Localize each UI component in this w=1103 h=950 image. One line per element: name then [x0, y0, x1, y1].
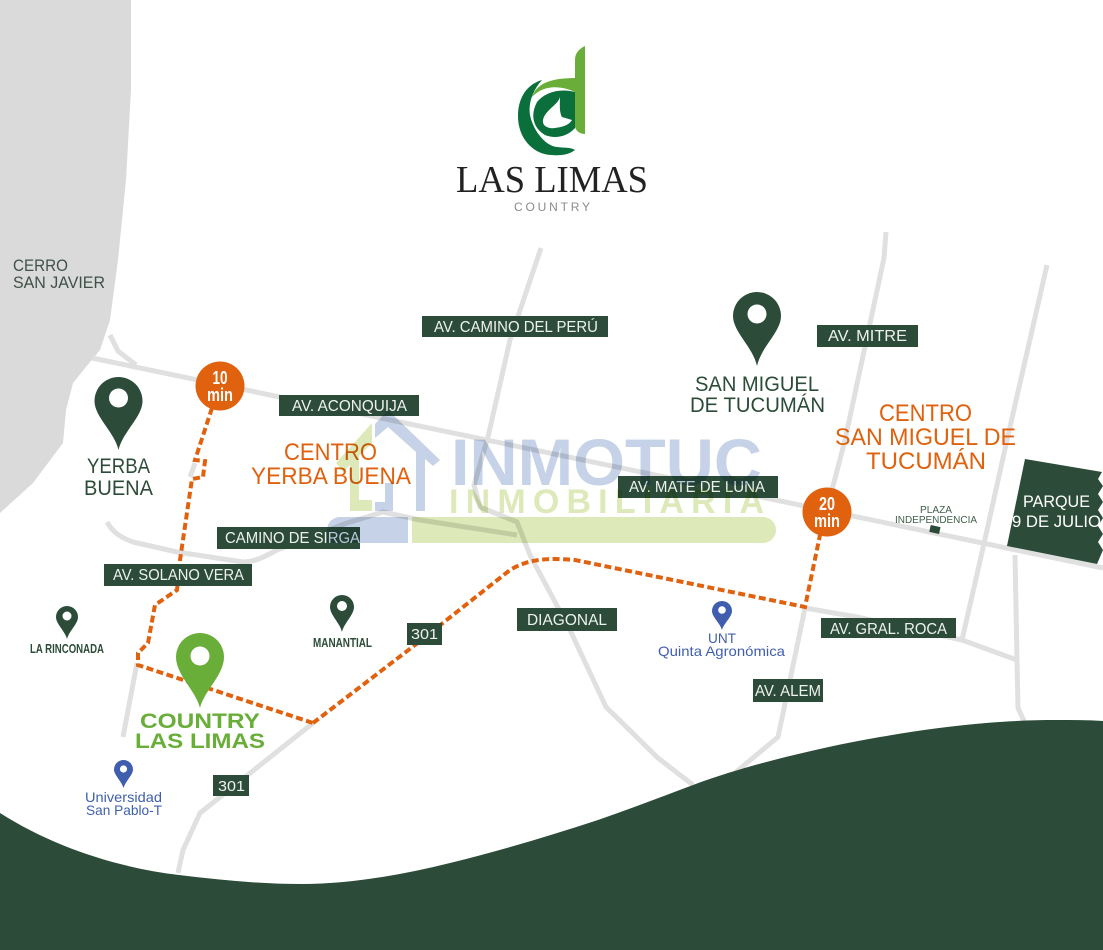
mountain label: CERRO — [13, 256, 68, 275]
logo mark — [518, 46, 585, 155]
label: San Miguel de Tucumán: SAN MIGUEL — [695, 373, 819, 396]
label: Centro Yerba Buena — [251, 439, 411, 490]
label: Yerba Buena: BUENA — [84, 477, 153, 500]
landmark: Plaza Independencia — [895, 504, 977, 534]
label: San Miguel de Tucumán: DE TUCUMÁN — [690, 394, 825, 417]
landmark: Plaza Independencia: PLAZA — [920, 504, 952, 516]
label: Universidad San Pablo-T: Universidad — [85, 789, 162, 805]
label: Country Las Limas: LAS LIMAS — [135, 730, 265, 753]
street label: Av. Aconquija: AV. ACONQUIJA — [292, 398, 408, 415]
label: Centro Yerba Buena: YERBA BUENA — [251, 463, 411, 490]
pin: San Miguel de Tucumán — [733, 292, 781, 366]
time badge: 10 min — [196, 362, 244, 410]
logo: Las Limas Country — [456, 46, 648, 214]
label: Centro San Miguel de Tucumán: SAN MIGUEL DE — [835, 424, 1016, 451]
label: Universidad San Pablo-T — [85, 789, 162, 818]
street label: Av. Solano Vera: AV. SOLANO VERA — [113, 567, 245, 584]
time badge: 20 min — [802, 488, 852, 536]
label: Centro San Miguel de Tucumán: CENTRO — [879, 400, 972, 427]
watermark bar green — [412, 517, 776, 543]
mountain area: Cerro San Javier — [0, 0, 131, 513]
mountain label: SAN JAVIER — [13, 273, 105, 292]
logo subtitle: COUNTRY — [514, 200, 590, 214]
watermark: Inmotuc Inmobiliaria — [327, 410, 776, 543]
time badge: 20 min: min — [814, 511, 840, 531]
pin: Universidad San Pablo-T — [114, 760, 133, 788]
label: Country Las Limas: COUNTRY — [140, 710, 260, 733]
route: dotted path to San Miguel, 20 min — [313, 535, 820, 723]
logo wordmark: LAS LIMAS — [456, 159, 648, 201]
bottom green wave — [0, 720, 1103, 950]
street label: Av. Alem: AV. ALEM — [755, 683, 821, 700]
watermark name: INMOTUC — [451, 425, 762, 499]
street label: Av. Gral. Roca: AV. GRAL. ROCA — [830, 621, 948, 638]
park: Parque 9 de Julio — [1007, 459, 1103, 564]
street label: Diagonal — [517, 608, 617, 631]
label: UNT Quinta Agronómica — [658, 630, 785, 659]
street label: Av. Mitre — [817, 325, 918, 347]
route: dotted path to Yerba Buena, 10 min — [138, 408, 313, 723]
route badge: 301 south: 301 — [218, 778, 245, 795]
street label: Diagonal: DIAGONAL — [527, 612, 607, 629]
pin: La Rinconada — [56, 606, 78, 639]
label: Manantial: MANANTIAL — [313, 635, 372, 650]
street label: Av. Mitre: AV. MITRE — [828, 328, 907, 345]
park: Parque 9 de Julio: 9 DE JULIO — [1012, 512, 1101, 531]
route badge: 301 north — [407, 623, 442, 645]
street label: Camino de Sirga: CAMINO DE SIRGA — [225, 530, 361, 547]
time badge: 10 min: 10 — [212, 368, 228, 388]
label: Centro Yerba Buena: CENTRO — [284, 439, 377, 466]
label: Centro San Miguel de Tucumán — [835, 400, 1016, 475]
label: La Rinconada: LA RINCONADA — [30, 641, 104, 656]
label: Yerba Buena: YERBA — [87, 455, 150, 478]
landmark: Plaza Independencia: INDEPENDENCIA — [895, 514, 977, 526]
street label: Av. Camino del Perú: AV. CAMINO DEL PERÚ — [434, 319, 598, 336]
label: UNT Quinta Agronómica: Quinta Agronómica — [658, 643, 785, 659]
street label: Av. Aconquija — [279, 395, 419, 416]
mountain label — [13, 256, 105, 292]
park: Parque 9 de Julio: PARQUE — [1023, 492, 1090, 511]
pin: Manantial — [330, 595, 354, 632]
pin: Yerba Buena — [94, 377, 142, 450]
watermark bar blue — [327, 517, 408, 543]
pin: UNT Quinta Agronómica — [712, 601, 732, 630]
street label: Av. Mate de Luna: AV. MATE DE LUNA — [629, 479, 766, 496]
label: Universidad San Pablo-T: San Pablo-T — [86, 802, 162, 818]
label: UNT Quinta Agronómica: UNT — [708, 630, 736, 646]
street label: Av. Mate de Luna — [618, 476, 778, 498]
route badge: 301 north: 301 — [411, 626, 438, 643]
label: Centro San Miguel de Tucumán: TUCUMÁN — [866, 448, 986, 475]
road network — [92, 232, 1103, 873]
time badge: 10 min: min — [207, 385, 233, 405]
watermark house icon — [336, 410, 440, 511]
route badge: 301 south — [213, 775, 249, 796]
label: Country Las Limas — [135, 710, 265, 753]
label: Yerba Buena — [84, 455, 153, 500]
watermark subtitle: INMOBILIARIA — [449, 483, 764, 521]
time badge: 20 min: 20 — [819, 494, 835, 514]
label: San Miguel de Tucumán — [690, 373, 825, 417]
pin: Country Las Limas — [176, 633, 224, 708]
